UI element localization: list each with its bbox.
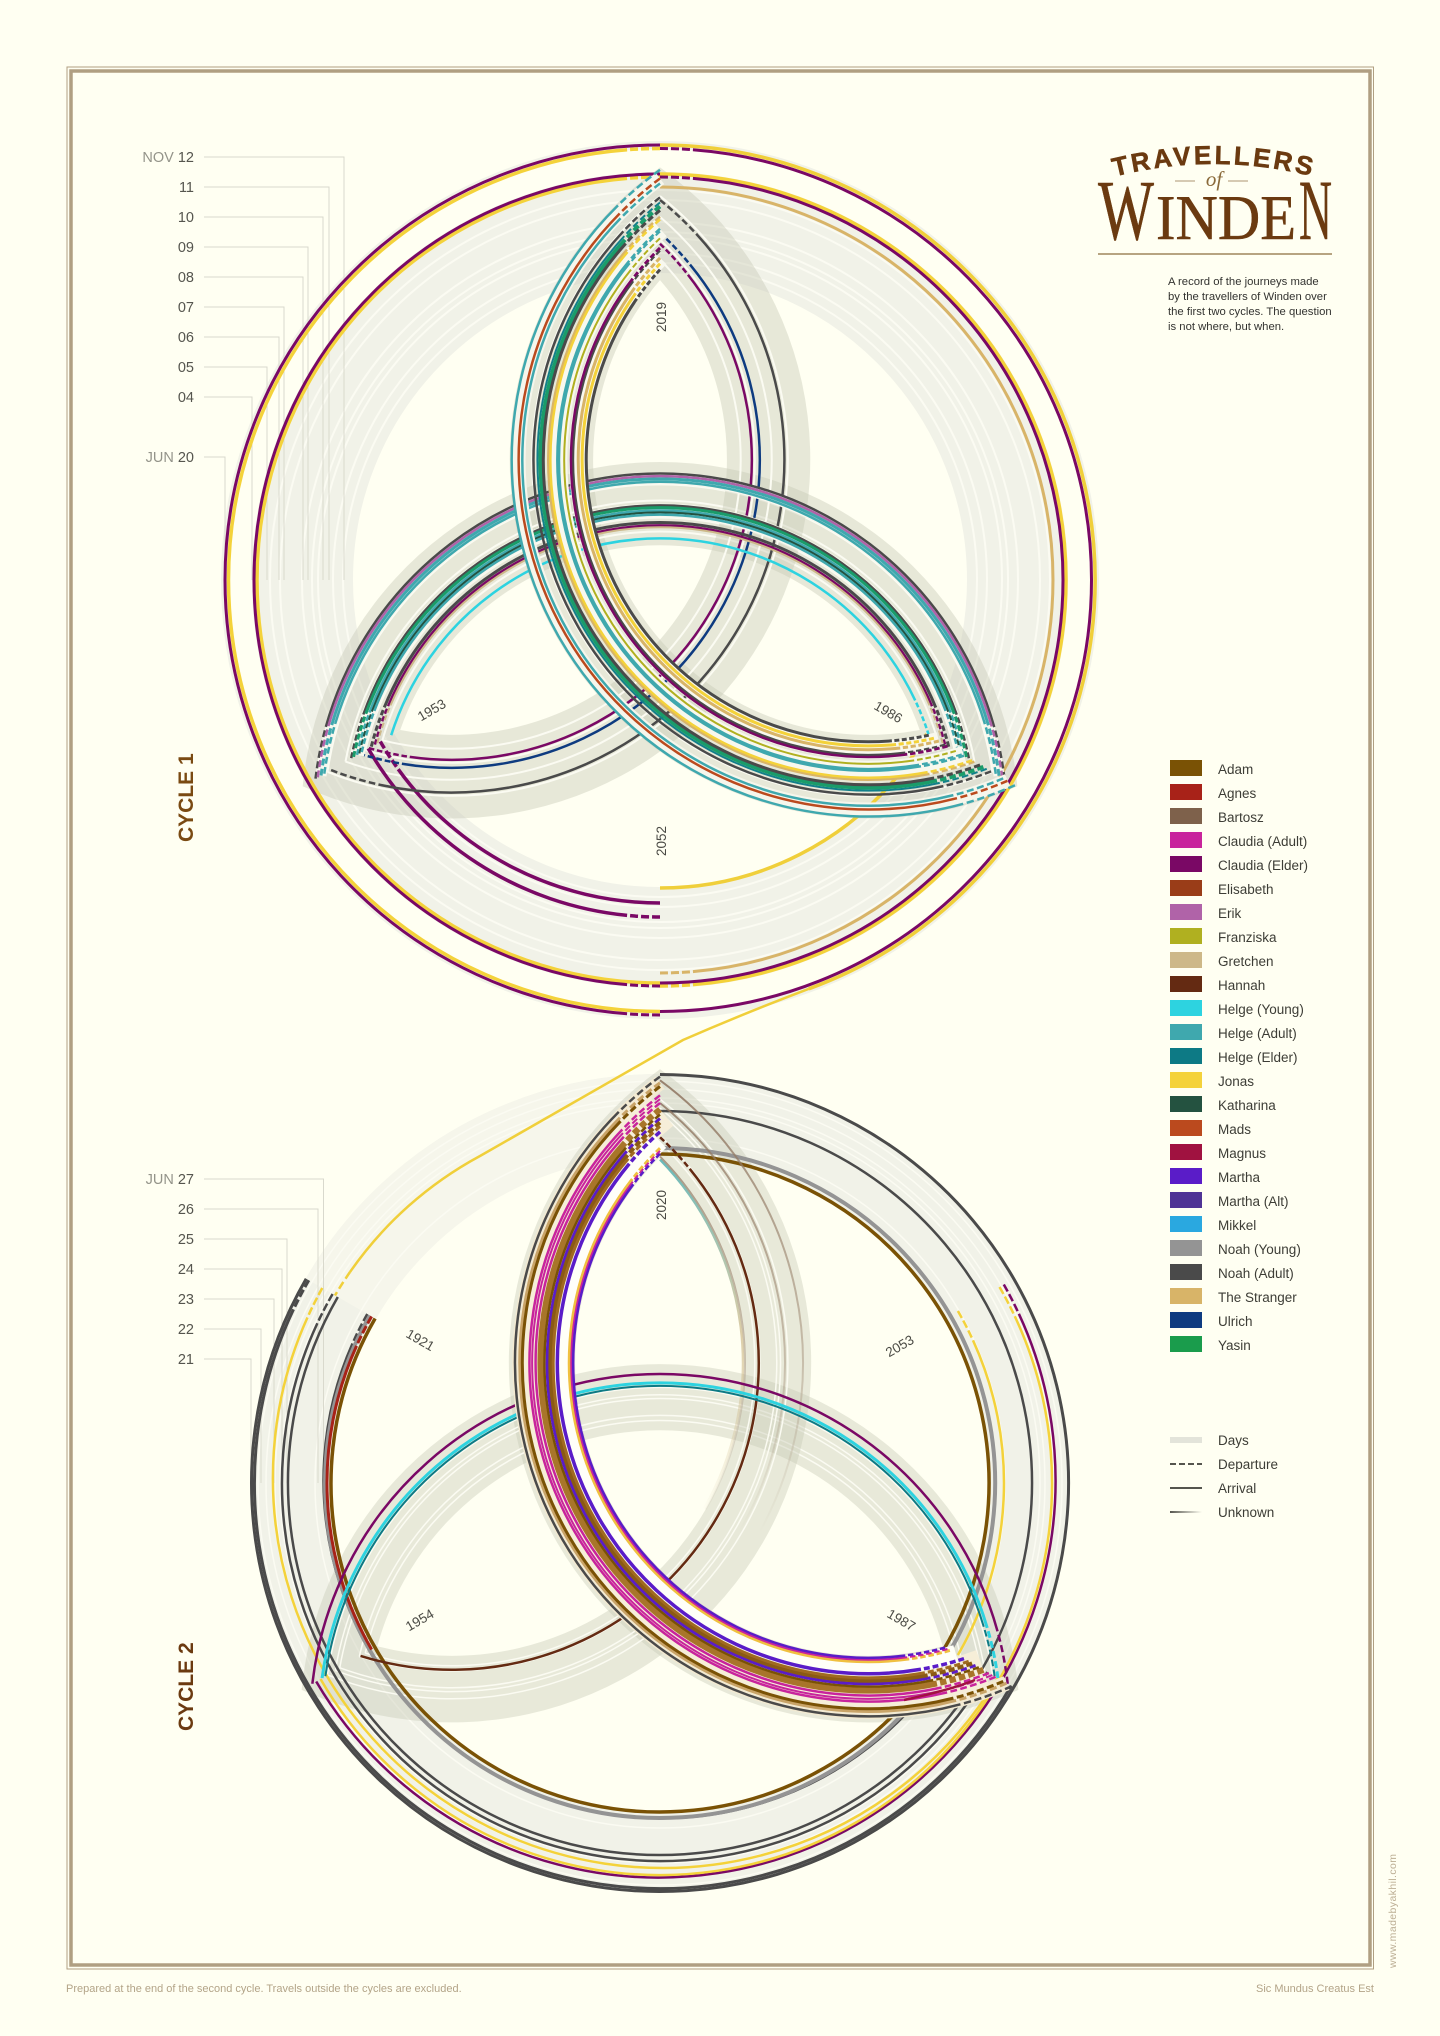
date labels: cycle 2: 26: [178, 1202, 194, 1218]
legend: characters: [1170, 760, 1308, 1353]
arc 1987 to 1954: cycle 2: [287, 1246, 1078, 1985]
Bartosz: Bartosz: [1218, 810, 1264, 825]
title block: W: [1098, 162, 1154, 258]
The Stranger: The Stranger: [1218, 1290, 1297, 1305]
date labels: cycle 1: 11: [179, 180, 194, 196]
date labels: cycle 1: 08: [178, 270, 194, 286]
Franziska: Franziska: [1218, 930, 1277, 945]
credit: www.madebyakhil.com: [1387, 1854, 1399, 1969]
description: by the travellers of Winden over: [1168, 291, 1327, 303]
Claudia Elder: [1170, 856, 1308, 873]
Mads: [1170, 1120, 1251, 1137]
Claudia Adult: Claudia (Adult): [1218, 834, 1307, 849]
year labels: cycle 2: 1987: [884, 1606, 918, 1634]
lens day bands: cycle 2: [122, 1053, 1094, 2000]
Elisabeth: [1170, 880, 1274, 897]
Katharina: [1170, 1096, 1276, 1113]
Yasin: Yasin: [1218, 1338, 1251, 1353]
description: the first two cycles. The question: [1168, 306, 1332, 318]
Helge Elder: [1170, 1048, 1298, 1065]
description: A record of the journeys made: [1168, 276, 1319, 288]
Noah Adult: [1170, 1264, 1294, 1281]
cycle label 1: CYCLE 1: [175, 753, 198, 842]
Departure key: Departure: [1218, 1457, 1278, 1472]
year labels: cycle 1: [415, 302, 905, 856]
arc 2019 to 1986: cycle 1: [512, 170, 1015, 817]
Noah Young: Noah (Young): [1218, 1242, 1301, 1257]
faded journeys on the 2020 to 1954 arc: [660, 1080, 803, 1538]
Mikkel: [1170, 1216, 1256, 1233]
chart: cycle 2: [122, 1053, 1094, 2000]
title block: N: [1299, 162, 1332, 258]
arc 2020 to 1954: cycle 2: [211, 1130, 871, 1741]
Helge Young: [1170, 1000, 1304, 1017]
Elisabeth: Elisabeth: [1218, 882, 1274, 897]
date labels: cycle 2: 25: [178, 1232, 194, 1248]
title block: TRAVELLERS: [1110, 146, 1313, 176]
title block: [1098, 146, 1332, 258]
date labels: cycle 1: NOV 12: [142, 150, 194, 166]
Noah Young: [1170, 1240, 1301, 1257]
footer left: Prepared at the end of the second cycle. Travels outside the cycles are excluded.: [66, 1983, 462, 1995]
date labels: cycle 2: [146, 1172, 194, 1368]
date labels: cycle 1: 04: [178, 390, 194, 406]
Mads: Mads: [1218, 1122, 1251, 1137]
title block: of: [1206, 167, 1225, 191]
Helge Adult: Helge (Adult): [1218, 1026, 1297, 1041]
date labels: cycle 1: 06: [178, 330, 194, 346]
short Magnus arc near 1987: [904, 1680, 975, 1700]
date labels: cycle 1: 09: [178, 240, 194, 256]
Arrival key: Arrival: [1218, 1481, 1256, 1496]
cycle label 2: CYCLE 2: [175, 1642, 198, 1731]
date labels: cycle 1: 10: [178, 210, 194, 226]
outer day ring: cycle 2: [258, 1074, 1062, 1885]
date guides: cycle 2: [204, 1179, 324, 1483]
year labels: cycle 2: 1954: [403, 1606, 437, 1634]
description: is not where, but when.: [1168, 321, 1284, 333]
Jonas: [1170, 1072, 1254, 1089]
ring journeys: cycle 2: [252, 1074, 1069, 1892]
Agnes: [1170, 784, 1257, 801]
ring journeys: cycle 1: [225, 145, 1092, 1015]
Erik: Erik: [1218, 906, 1241, 921]
Gretchen: [1170, 952, 1274, 969]
date labels: cycle 1: 05: [178, 360, 194, 376]
Helge Young: Helge (Young): [1218, 1002, 1304, 1017]
Jonas journey linking cycle 1 to cycle 2: [335, 145, 1095, 1295]
year labels: cycle 1: 2052: [654, 826, 669, 856]
Hannah: [1170, 976, 1265, 993]
Jonas: Jonas: [1218, 1074, 1254, 1089]
year labels: cycle 2: 1921: [403, 1326, 437, 1354]
outer day ring: cycle 1: [225, 145, 1095, 1015]
Unknown key: Unknown: [1218, 1505, 1274, 1520]
date labels: cycle 1: [142, 150, 194, 466]
Yasin: [1170, 1336, 1251, 1353]
Days key: Days: [1218, 1433, 1249, 1448]
Martha: Martha: [1218, 1170, 1261, 1185]
year labels: cycle 1: 1953: [415, 696, 449, 724]
Erik: [1170, 904, 1241, 921]
year labels: cycle 2: [403, 1190, 918, 1634]
Helge Adult: [1170, 1024, 1297, 1041]
Adam: [1170, 760, 1253, 777]
date labels: cycle 1: 07: [178, 300, 194, 316]
year labels: cycle 2: 2053: [883, 1332, 917, 1360]
Martha: [1170, 1168, 1261, 1185]
Martha Alt: Martha (Alt): [1218, 1194, 1289, 1209]
Hannah: Hannah: [1218, 978, 1265, 993]
Magnus: Magnus: [1218, 1146, 1266, 1161]
date labels: cycle 2: 22: [178, 1322, 194, 1338]
legend: line styles: [1170, 1433, 1278, 1520]
Ulrich: Ulrich: [1218, 1314, 1253, 1329]
Ulrich: [1170, 1312, 1253, 1329]
date labels: cycle 1: JUN 20: [146, 450, 194, 466]
Claudia Elder: Claudia (Elder): [1218, 858, 1308, 873]
Claudia Adult: [1170, 832, 1307, 849]
chart: cycle 1: [124, 145, 1095, 1096]
date labels: cycle 2: JUN 27: [146, 1172, 194, 1188]
The Stranger: [1170, 1288, 1297, 1305]
Magnus: [1170, 1144, 1266, 1161]
Noah Adult: Noah (Adult): [1218, 1266, 1294, 1281]
title block: INDE: [1156, 182, 1296, 253]
Martha Alt: [1170, 1192, 1289, 1209]
arc 2019 to 1953: cycle 1: [166, 189, 906, 878]
date labels: cycle 2: 23: [178, 1292, 194, 1308]
Franziska: [1170, 928, 1277, 945]
date labels: cycle 2: 24: [178, 1262, 194, 1278]
footer right: Sic Mundus Creatus Est: [1256, 1983, 1374, 1995]
date labels: cycle 2: 21: [178, 1352, 194, 1368]
Agnes: Agnes: [1218, 786, 1257, 801]
Helge Elder: Helge (Elder): [1218, 1050, 1298, 1065]
Katharina: Katharina: [1218, 1098, 1276, 1113]
Mikkel: Mikkel: [1218, 1218, 1256, 1233]
Adam: Adam: [1218, 762, 1253, 777]
Bartosz: [1170, 808, 1264, 825]
year labels: cycle 2: 2020: [654, 1190, 669, 1220]
year labels: cycle 1: 2019: [654, 302, 669, 332]
year labels: cycle 1: 1986: [871, 698, 905, 726]
Gretchen: Gretchen: [1218, 954, 1274, 969]
date guides: cycle 1: [204, 157, 344, 580]
arc 2020 to 1987: cycle 2: [515, 1077, 1012, 1716]
lens day bands: cycle 1: [124, 151, 1092, 1096]
arc 1986 to 1953: cycle 1: [291, 346, 1074, 1077]
